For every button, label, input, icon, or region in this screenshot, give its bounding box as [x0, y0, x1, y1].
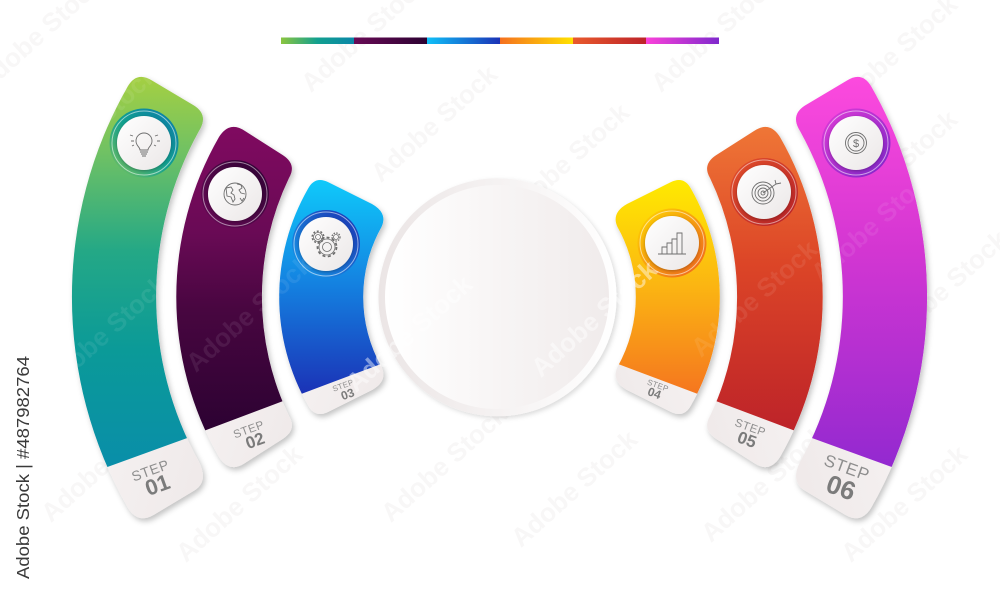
label: step 02: 02: [243, 429, 267, 453]
label: step 01: [129, 456, 173, 501]
watermarks over panels: Adobe Stock: [685, 234, 823, 363]
watermarks: Adobe Stock: [35, 399, 173, 528]
watermarks over panels: Adobe Stock: [805, 159, 943, 288]
panel: step 06: [796, 77, 927, 518]
icon: gears: [292, 210, 360, 278]
label: step 06: [821, 451, 872, 507]
watermarks: Adobe Stock: [835, 439, 973, 568]
panel: step 05: [707, 127, 823, 467]
label: step 05: 05: [735, 428, 759, 452]
label: step 03: STEP: [331, 378, 355, 394]
label: step 06: 06: [822, 469, 860, 507]
panel: step 02: [176, 127, 292, 467]
watermarks: Adobe Stock: [825, 104, 963, 233]
label: step 06: STEP: [821, 451, 872, 485]
watermarks: Adobe Stock: [505, 424, 643, 553]
watermarks over panels: Adobe Stock: [25, 59, 163, 188]
icon: dollar coin: $: [853, 138, 859, 150]
watermarks over panels: [25, 59, 943, 398]
watermarks: Adobe Stock: [170, 439, 308, 568]
icon: bar chart: [638, 208, 706, 278]
panel: step 04: [616, 180, 720, 414]
watermarks over panels: Adobe Stock: [35, 269, 173, 398]
label: step 04: [646, 378, 670, 402]
source credit: Adobe Stock | #487982764: [13, 356, 33, 579]
top colour bar: [281, 38, 719, 44]
icon: light bulb: [110, 108, 178, 178]
label: step 01: 01: [142, 469, 173, 501]
label: step 03: [331, 378, 357, 403]
watermarks over panels: Adobe Stock: [180, 249, 318, 378]
watermarks: Adobe Stock: [375, 399, 513, 528]
watermarks: Adobe Stock: [695, 419, 833, 548]
watermarks: Adobe Stock: [497, 97, 635, 226]
label: step 02: [232, 419, 267, 453]
panel: step 01: [72, 77, 203, 518]
watermarks: Adobe Stock: [365, 59, 503, 188]
label: step 01: STEP: [129, 456, 171, 484]
panel: step 03: [279, 180, 383, 414]
label: step 04: 04: [646, 384, 663, 402]
label: step 04: STEP: [646, 378, 670, 394]
watermarks over panels: Adobe Stock: [340, 269, 478, 398]
label: step 05: [733, 417, 767, 452]
icon: globe: [201, 160, 269, 228]
label: step 05: STEP: [733, 417, 767, 439]
label: step 03: 03: [339, 385, 357, 403]
centre circle: [378, 178, 616, 416]
icon: target: [730, 158, 798, 226]
label: step 02: STEP: [232, 419, 266, 441]
watermarks over panels: Adobe Stock: [525, 254, 663, 383]
icon: dollar coin: [822, 108, 890, 178]
